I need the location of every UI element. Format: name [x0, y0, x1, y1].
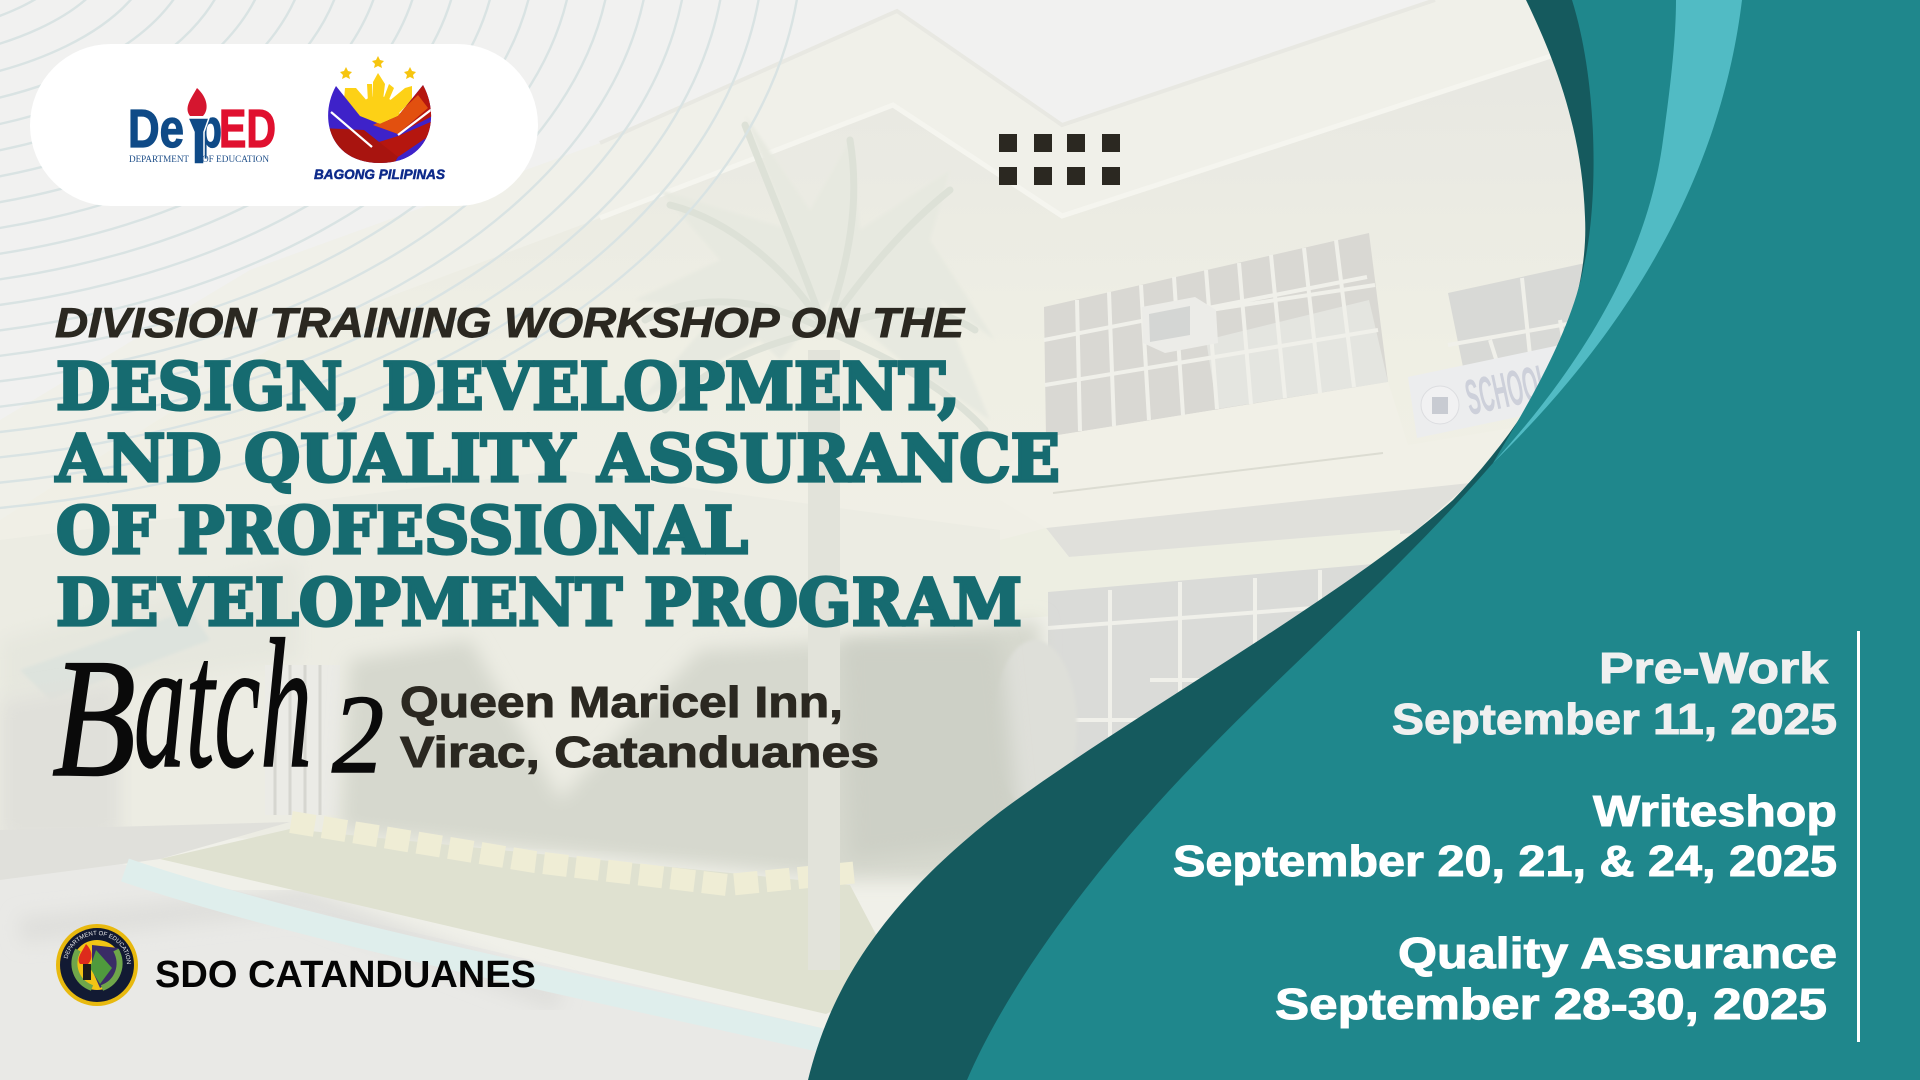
- main title: [55, 349, 1060, 641]
- schedule: pre-work: Pre-Work: [1599, 644, 1829, 693]
- batch label: B: [52, 624, 136, 812]
- subtitle: DIVISION TRAINING WORKSHOP ON THE: [55, 299, 966, 346]
- decorative arcs: [0, 0, 802, 515]
- batch label: atch: [134, 602, 312, 807]
- upper windows: [1044, 233, 1388, 437]
- logo: DepED: p: [198, 99, 222, 159]
- logo: DepED: OF EDUCATION: [202, 155, 269, 165]
- ground: [0, 822, 290, 885]
- venue: [400, 678, 879, 777]
- schedule: pre-work: September 11, 2025: [1392, 695, 1837, 744]
- schedule: writeshop: September 20, 21, & 24, 2025: [1173, 837, 1837, 886]
- venue: Virac, Catanduanes: [400, 728, 879, 777]
- logo: Bagong Pilipinas: [314, 56, 446, 182]
- batch label: [52, 602, 384, 812]
- batch label: 2: [332, 673, 384, 797]
- vertical divider: [1857, 631, 1860, 1042]
- division seal: [56, 924, 138, 1006]
- dot grid icon: [999, 134, 1120, 185]
- main title: OF PROFESSIONAL: [56, 493, 748, 569]
- left building tones and awning: [0, 560, 300, 700]
- logo: DepED: [128, 88, 276, 165]
- schedule: quality assurance: September 28-30, 2025: [1275, 980, 1827, 1029]
- right window: [1448, 262, 1590, 367]
- division seal: DEPARTMENT OF EDUCATION: [64, 930, 132, 964]
- logo pill: [30, 44, 538, 206]
- logo: Bagong Pilipinas: BAGONG PILIPINAS: [314, 166, 446, 182]
- schedule: quality assurance: Quality Assurance: [1398, 929, 1837, 978]
- decorative curved teal panel: [808, 0, 1920, 1080]
- schedule: quality assurance: [1275, 929, 1837, 1029]
- main title: DEVELOPMENT PROGRAM: [56, 565, 1022, 641]
- schedule: pre-work: [1392, 644, 1837, 744]
- main title: DESIGN, DEVELOPMENT,: [56, 349, 960, 425]
- palm tree: [808, 350, 840, 970]
- school sign: [1408, 345, 1560, 438]
- main title: AND QUALITY ASSURANCE: [55, 421, 1060, 497]
- schedule: writeshop: [1173, 787, 1837, 886]
- schedule: [1173, 644, 1837, 1029]
- division name: SDO CATANDUANES: [155, 954, 536, 996]
- lower windows: [1048, 560, 1420, 900]
- background: washed-out school building photo: SCHOOL: [1461, 353, 1555, 426]
- schedule: writeshop: Writeshop: [1593, 787, 1837, 836]
- logo: DepED: De: [128, 99, 184, 159]
- logo: DepED: ED: [219, 99, 276, 159]
- venue: Queen Maricel Inn,: [400, 678, 843, 727]
- shrubs: [340, 620, 1050, 880]
- logo: DepED: DEPARTMENT: [129, 155, 189, 165]
- ledge and soffit: [1000, 382, 1560, 528]
